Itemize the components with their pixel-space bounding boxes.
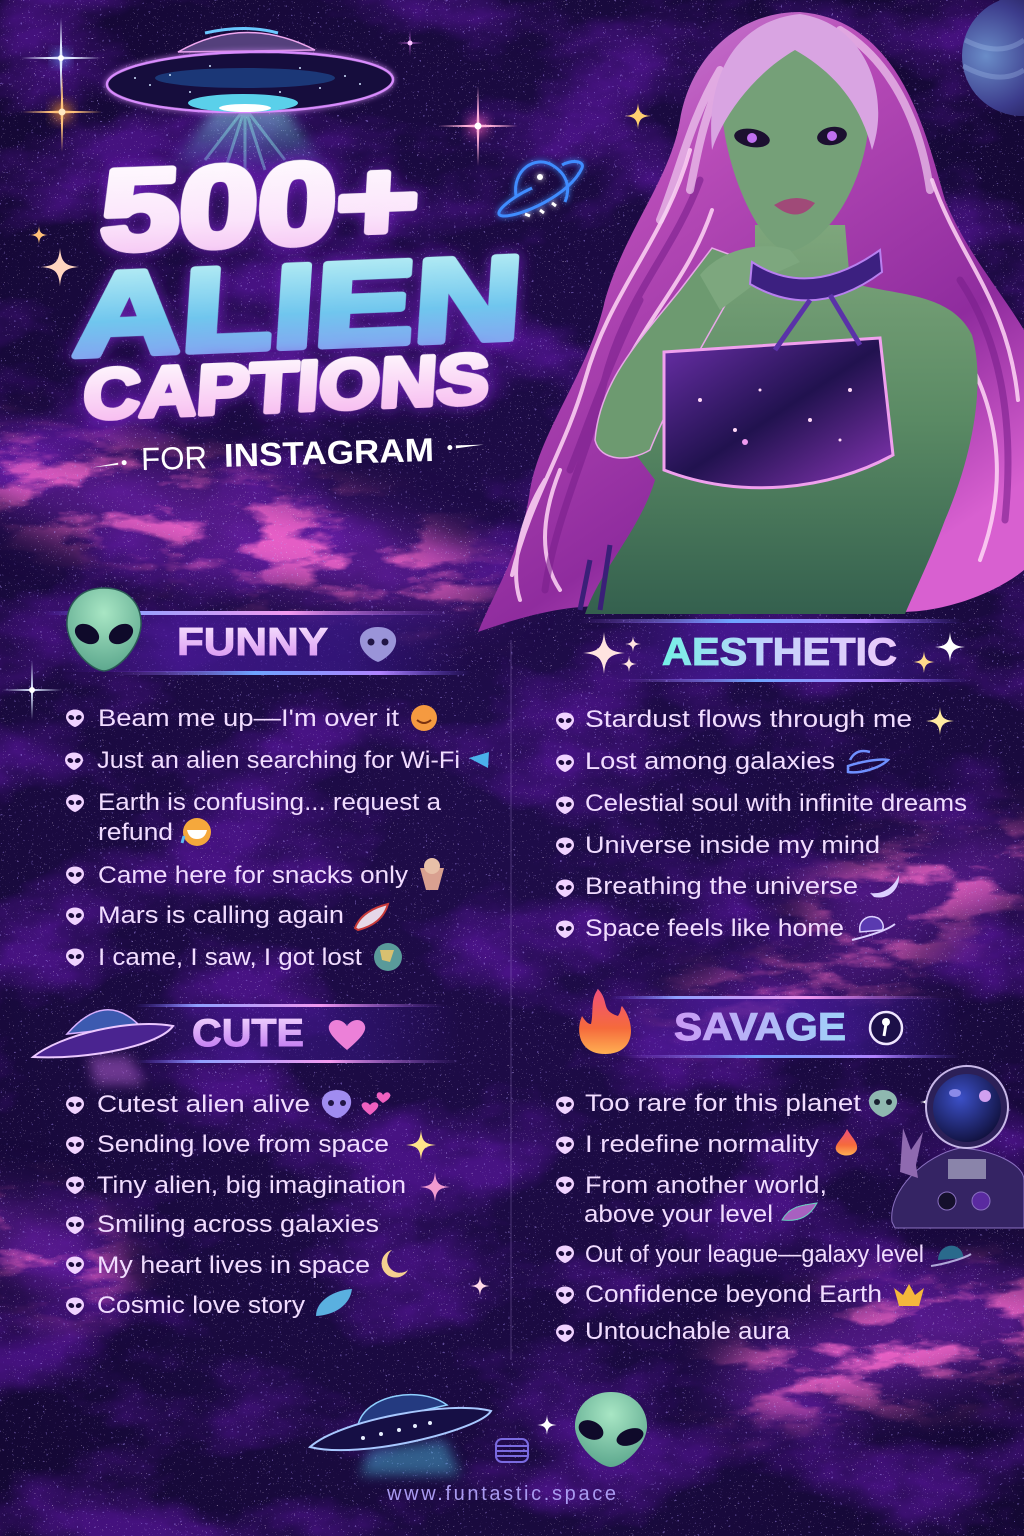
- decorative sparkles: [2, 18, 982, 1296]
- footer alien head: [575, 1392, 647, 1467]
- icon: sparkles right: [913, 632, 965, 673]
- cute captions: [66, 1090, 450, 1319]
- caption row: Smiling across galaxies: [97, 1211, 379, 1238]
- footer menu icon: [496, 1439, 528, 1462]
- subtitle: for Instagram: [92, 430, 484, 479]
- caption row: Confidence beyond Earth: [585, 1281, 882, 1308]
- caption row: Beam me up—I'm over it: [98, 705, 399, 732]
- heading: savage: SAVAGE: [674, 1006, 846, 1049]
- funny captions: [65, 705, 489, 971]
- raised arm: [595, 248, 750, 458]
- caption row: [556, 1129, 857, 1158]
- caption row: refund: [98, 819, 173, 846]
- caption row: Sending love from space: [97, 1131, 389, 1158]
- section: aesthetic: [556, 619, 970, 942]
- icon: purple saucer: [33, 1010, 173, 1085]
- caption row: I redefine normality: [585, 1131, 819, 1158]
- caption row: Universe inside my mind: [585, 832, 880, 859]
- hair front: [711, 14, 878, 150]
- caption row: Stardust flows through me: [585, 706, 912, 733]
- caption row: [66, 902, 388, 930]
- icon: sparkles left: [583, 632, 641, 674]
- footer sparkle: [537, 1415, 557, 1435]
- caption row: [66, 1172, 450, 1202]
- illustrated alien woman: [478, 12, 1024, 632]
- large flying saucer: [106, 28, 394, 178]
- caption row: Too rare for this planet: [585, 1090, 861, 1117]
- caption row: Celestial soul with infinite dreams: [585, 790, 967, 817]
- footer url: www.funtastic.space: [386, 1483, 616, 1505]
- savage banner: [610, 996, 960, 1058]
- eyes: [733, 126, 771, 150]
- section: funny: [45, 588, 489, 971]
- heading: funny: FUNNY: [177, 621, 328, 664]
- caption row: Mars is calling again: [98, 902, 344, 929]
- aesthetic captions: [556, 706, 967, 942]
- icon: exclamation circle: [870, 1012, 902, 1044]
- caption row: [556, 748, 888, 775]
- caption row: Lost among galaxies: [585, 748, 835, 775]
- caption row: [556, 1172, 827, 1228]
- caption row: [66, 789, 442, 846]
- caption row: My heart lives in space: [97, 1252, 370, 1279]
- icon: pink heart: [329, 1020, 365, 1050]
- caption row: From another world,: [585, 1172, 827, 1199]
- caption row: Cutest alien alive: [97, 1091, 310, 1118]
- hair back: [478, 12, 1024, 632]
- footer saucer: [310, 1395, 491, 1475]
- caption row: [66, 858, 444, 890]
- lips: [774, 198, 815, 215]
- section: cute: [33, 1004, 460, 1319]
- icon: grey alien face: [360, 627, 396, 662]
- caption row: [556, 706, 954, 735]
- planet top right: [962, 0, 1024, 116]
- aesthetic banner: [578, 619, 970, 682]
- caption row: Out of your league—galaxy level: [585, 1241, 924, 1268]
- caption row: I came, I saw, I got lost: [98, 944, 362, 971]
- title: ALIEN: ALIEN: [70, 232, 526, 382]
- subtitle: for Instagram: INSTAGRAM: [223, 431, 434, 474]
- caption row: [66, 1130, 436, 1160]
- heading: aesthetic: AESTHETIC: [662, 631, 897, 674]
- collar: [750, 250, 882, 300]
- body: [585, 225, 978, 614]
- caption row: Came here for snacks only: [98, 862, 408, 889]
- face: [722, 45, 868, 252]
- title: 500+: 500+: [98, 137, 422, 275]
- astronaut: [892, 1066, 1024, 1228]
- caption row: [556, 915, 895, 942]
- caption row: above your level: [584, 1201, 773, 1228]
- title: [70, 137, 526, 434]
- caption row: Tiny alien, big imagination: [97, 1172, 406, 1199]
- subtitle: for Instagram: FOR: [141, 439, 208, 477]
- cute banner: [130, 1004, 460, 1063]
- savage captions: [556, 1090, 971, 1345]
- funny banner: [45, 611, 470, 675]
- caption row: Just an alien searching for Wi-Fi: [97, 747, 460, 774]
- caption row: Space feels like home: [585, 915, 844, 942]
- hip straps: [580, 545, 610, 610]
- caption row: Untouchable aura: [585, 1318, 791, 1345]
- heading: cute: CUTE: [192, 1012, 304, 1055]
- caption row: [66, 1090, 390, 1118]
- icon: flame: [579, 989, 631, 1054]
- center divider: [510, 640, 512, 1360]
- neon ufo icon: [499, 162, 582, 216]
- title: CAPTIONS: CAPTIONS: [81, 339, 492, 434]
- icon: green alien head: [67, 588, 141, 671]
- section: savage: [556, 989, 1024, 1345]
- caption row: Breathing the universe: [585, 873, 858, 900]
- caption row: [66, 1250, 408, 1279]
- caption row: [66, 1289, 352, 1319]
- hand: [700, 246, 800, 310]
- caption row: Earth is confusing... request a: [98, 789, 442, 816]
- caption row: Cosmic love story: [97, 1292, 305, 1319]
- galaxy top: [664, 338, 893, 488]
